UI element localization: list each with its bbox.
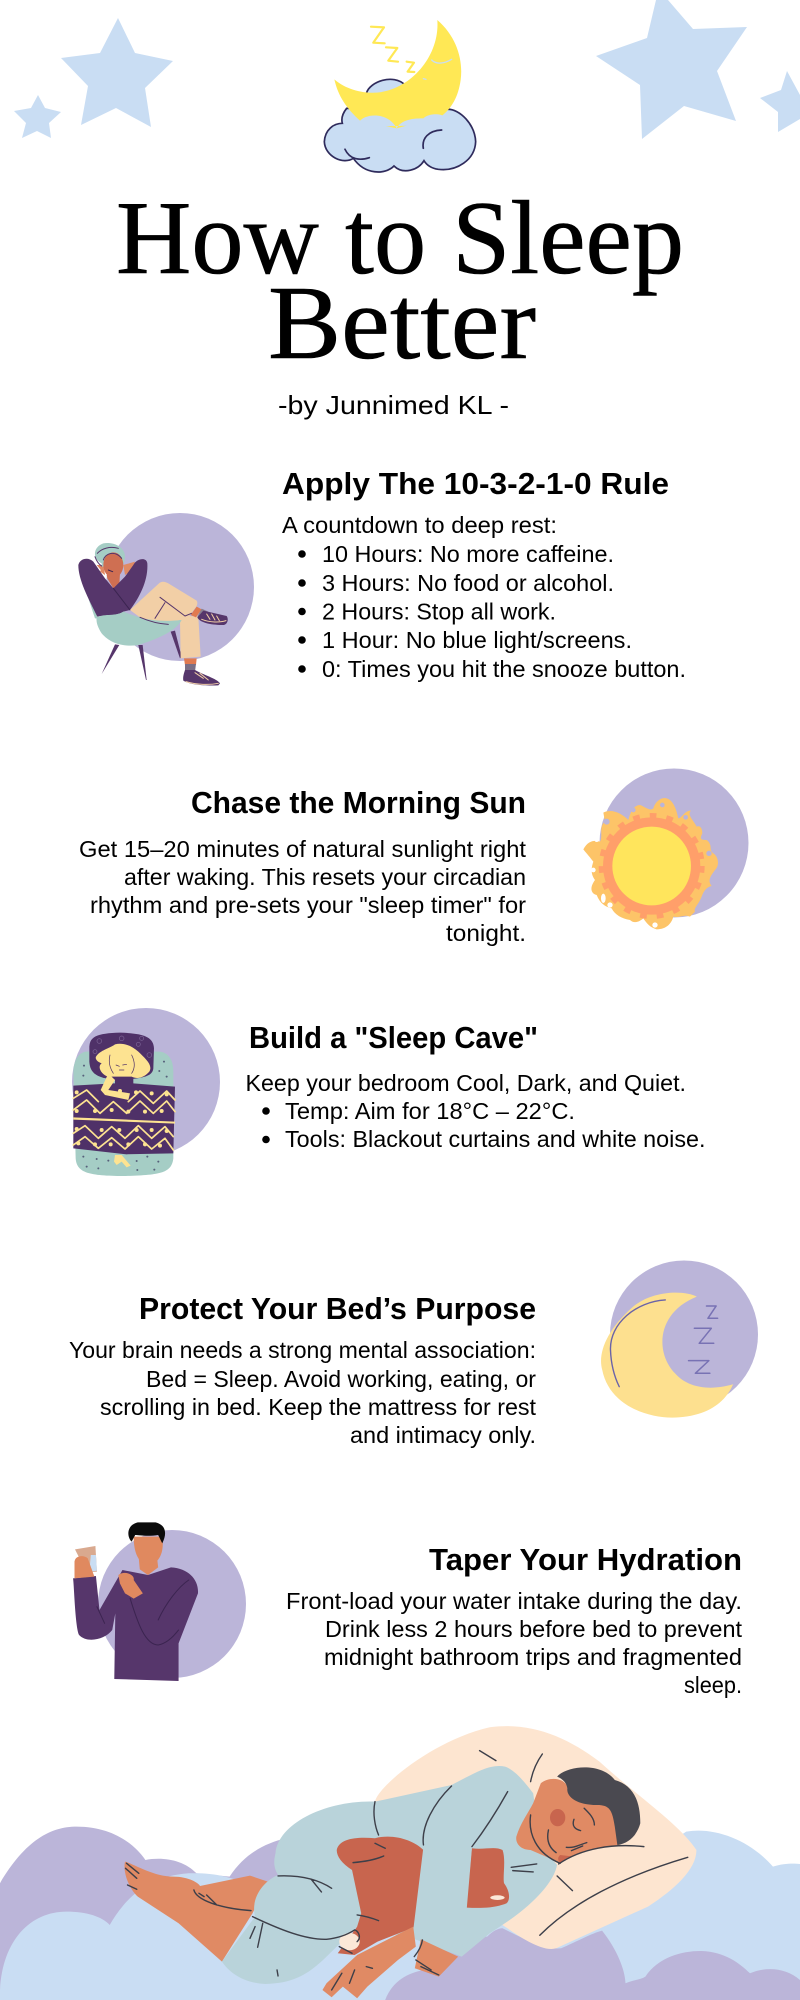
body text: and intimacy only. xyxy=(350,1422,536,1448)
bullet list: 3 Hours: No food or alcohol. xyxy=(322,570,614,596)
arm sleeve xyxy=(412,1773,508,1957)
hair xyxy=(557,1767,640,1845)
body text xyxy=(286,1588,743,1698)
pillow xyxy=(375,1726,696,1949)
bullet list: Tools: Blackout curtains and white noise. xyxy=(285,1126,706,1152)
title: How to Sleep xyxy=(116,179,684,296)
panel: 10-3-2-1-0 rule xyxy=(78,466,686,686)
body text: Get 15–20 minutes of natural sunlight right xyxy=(79,836,527,862)
heading: Apply The 10-3-2-1-0 Rule xyxy=(282,466,669,501)
body text: tonight. xyxy=(446,920,526,946)
pajama body xyxy=(222,1766,557,1984)
icon: sun xyxy=(583,768,748,929)
bullet list: 1 Hour: No blue light/screens. xyxy=(322,627,632,653)
intro text: A countdown to deep rest: xyxy=(282,512,557,538)
back purple clouds xyxy=(0,1827,357,2000)
decorative stars: top right xyxy=(596,0,800,139)
body text: midnight bathroom trips and fragmented xyxy=(324,1644,742,1670)
icon: person relaxing in chair xyxy=(78,513,254,686)
illustration: person sleeping on clouds hugging a teddy bear xyxy=(0,1726,800,2000)
body text xyxy=(79,836,527,946)
bullet list: Temp: Aim for 18°C – 22°C. xyxy=(285,1098,575,1124)
bullet list xyxy=(262,1098,706,1152)
icon: moon sleeping on cloud xyxy=(324,20,476,172)
body text: sleep. xyxy=(684,1672,742,1698)
intro text: Keep your bedroom Cool, Dark, and Quiet. xyxy=(246,1070,686,1096)
title: Better xyxy=(268,264,536,381)
teddy bear xyxy=(337,1837,423,1955)
body text xyxy=(69,1337,537,1448)
body text: Bed = Sleep. Avoid working, eating, or xyxy=(146,1366,536,1392)
body text: scrolling in bed. Keep the mattress for rest xyxy=(100,1394,537,1420)
heading: Chase the Morning Sun xyxy=(191,785,526,820)
bullet list xyxy=(298,541,686,682)
blue clouds xyxy=(0,1831,800,2000)
leg and foot xyxy=(124,1862,268,1962)
body text: Your brain needs a strong mental association: xyxy=(69,1337,536,1363)
icon: person tucked in bed xyxy=(72,1008,220,1176)
body text: Front-load your water intake during the day. xyxy=(286,1588,742,1614)
decorative stars: top left xyxy=(14,18,173,138)
bullet list: 0: Times you hit the snooze button. xyxy=(322,656,686,682)
front pillow xyxy=(503,1845,695,1948)
front purple clouds xyxy=(385,1928,800,2000)
bullet list: 2 Hours: Stop all work. xyxy=(322,598,556,624)
heading: Taper Your Hydration xyxy=(429,1542,742,1577)
body text: rhythm and pre-sets your "sleep timer" for xyxy=(90,892,526,918)
panel: bed purpose xyxy=(69,1260,758,1448)
heading: Build a "Sleep Cave" xyxy=(249,1020,538,1055)
bullet list: 10 Hours: No more caffeine. xyxy=(322,541,614,567)
detail lines xyxy=(126,1751,688,1990)
byline: -by Junnimed KL - xyxy=(278,390,509,420)
heading: Protect Your Bed’s Purpose xyxy=(139,1291,536,1326)
panel: sleep cave xyxy=(72,1008,706,1176)
hands xyxy=(322,1927,416,1998)
panel: hydration xyxy=(73,1522,743,1698)
icon: man holding a glass of water xyxy=(73,1522,246,1681)
icon: crescent moon with Zs xyxy=(601,1260,758,1418)
face xyxy=(516,1779,620,1863)
title xyxy=(116,179,684,381)
body text: after waking. This resets your circadian xyxy=(124,864,526,890)
body text: Drink less 2 hours before bed to prevent xyxy=(325,1616,743,1642)
panel: morning sun xyxy=(79,768,748,946)
